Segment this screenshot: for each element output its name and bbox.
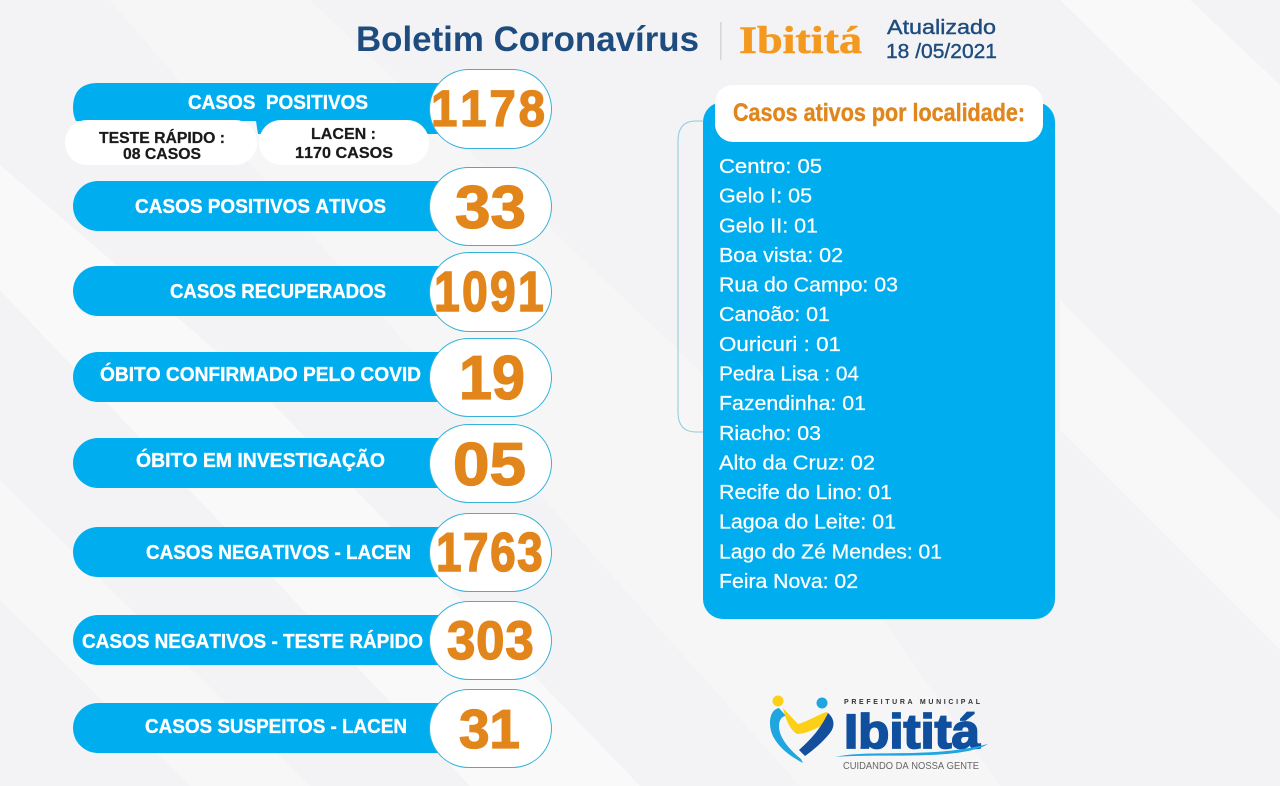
stat: obito em investigacao: 05: [453, 431, 526, 498]
stat: casos negativos teste rapido: CASOS NEGATIVOS - TESTE RÁPIDO: [82, 630, 423, 653]
panel: casos ativos por localidade: Feira Nova: 02: [719, 571, 858, 593]
stat: casos negativos teste rapido: 303: [447, 612, 534, 671]
stat: casos positivos: 1170 CASOS: [295, 145, 393, 162]
panel: casos ativos por localidade: Gelo I: 05: [719, 186, 812, 208]
stat: casos positivos: TESTE RÁPIDO :: [99, 128, 225, 147]
stat: casos recuperados: 1091: [434, 260, 544, 323]
panel: casos ativos por localidade: Recife do Lino: 01: [719, 482, 892, 504]
stat: casos positivos ativos: CASOS POSITIVOS ATIVOS: [135, 196, 386, 218]
stat: obito confirmado: 19: [459, 344, 525, 413]
title: Atualizado: [887, 17, 996, 39]
panel: casos ativos por localidade: Gelo II: 01: [719, 215, 818, 237]
stat: obito em investigacao: [73, 424, 552, 502]
panel: casos ativos por localidade: Rua do Campo: 03: [719, 275, 898, 297]
stat: casos recuperados: [73, 252, 552, 332]
title: [356, 17, 997, 63]
logo: Prefeitura Municipal Ibititá: PREFEITURA MUNICIPAL: [844, 699, 981, 706]
stat: casos negativos lacen: 1763: [436, 521, 543, 583]
stat: obito confirmado: [73, 338, 552, 416]
panel: casos ativos por localidade: Pedra Lisa : 04: [719, 364, 859, 386]
logo: Prefeitura Municipal Ibititá: [770, 696, 988, 772]
stat: obito confirmado: ÓBITO CONFIRMADO PELO COVID: [100, 362, 421, 386]
title: Boletim Coronavírus: [356, 20, 699, 59]
stat: casos positivos: 08 CASOS: [123, 146, 201, 163]
panel: casos ativos por localidade: Riacho: 03: [719, 423, 821, 445]
stat: obito em investigacao: ÓBITO EM INVESTIGAÇÃO: [136, 448, 385, 472]
stat: casos negativos lacen: CASOS NEGATIVOS - LACEN: [146, 542, 411, 564]
panel: casos ativos por localidade: Alto da Cruz: 02: [719, 452, 875, 474]
logo: Prefeitura Municipal Ibititá: Ibititá: [844, 706, 980, 759]
stat: casos positivos: [65, 70, 552, 165]
stat: casos recuperados: CASOS RECUPERADOS: [170, 281, 386, 303]
panel: casos ativos por localidade: Boa vista: 02: [719, 245, 843, 267]
panel: casos ativos por localidade: Canoão: 01: [719, 304, 830, 326]
waves: [835, 744, 988, 757]
panel: casos ativos por localidade: Lago do Zé Mendes: 01: [719, 541, 942, 563]
stat: casos positivos ativos: 33: [455, 174, 526, 241]
panel: casos ativos por localidade: Lagoa do Leite: 01: [719, 512, 896, 534]
stat: casos negativos lacen: [73, 514, 552, 592]
panel: casos ativos por localidade: Casos ativos por localidade:: [733, 99, 1025, 127]
panel: casos ativos por localidade: [678, 85, 1055, 619]
stat: casos positivos: CASOS POSITIVOS: [188, 92, 368, 114]
title: 18 /05/2021: [886, 41, 997, 63]
panel: casos ativos por localidade: Ouricuri : 01: [719, 334, 841, 356]
logo: Prefeitura Municipal Ibititá: CUIDANDO DA NOSSA GENTE: [843, 761, 979, 772]
panel: casos ativos por localidade: Fazendinha: 01: [719, 393, 866, 415]
title: Ibititá: [739, 19, 862, 62]
stat: casos positivos: 1178: [431, 80, 545, 137]
stat: casos suspeitos: 31: [459, 698, 520, 760]
stat: casos suspeitos: [73, 690, 552, 768]
stat: casos positivos ativos: [73, 168, 552, 246]
panel: casos ativos por localidade: Centro: 05: [719, 156, 822, 178]
stat: casos positivos: LACEN :: [311, 126, 376, 143]
stat: casos suspeitos: CASOS SUSPEITOS - LACEN: [145, 716, 407, 738]
icon: heart with figures: [770, 696, 834, 763]
stat: casos negativos teste rapido: [73, 602, 552, 680]
